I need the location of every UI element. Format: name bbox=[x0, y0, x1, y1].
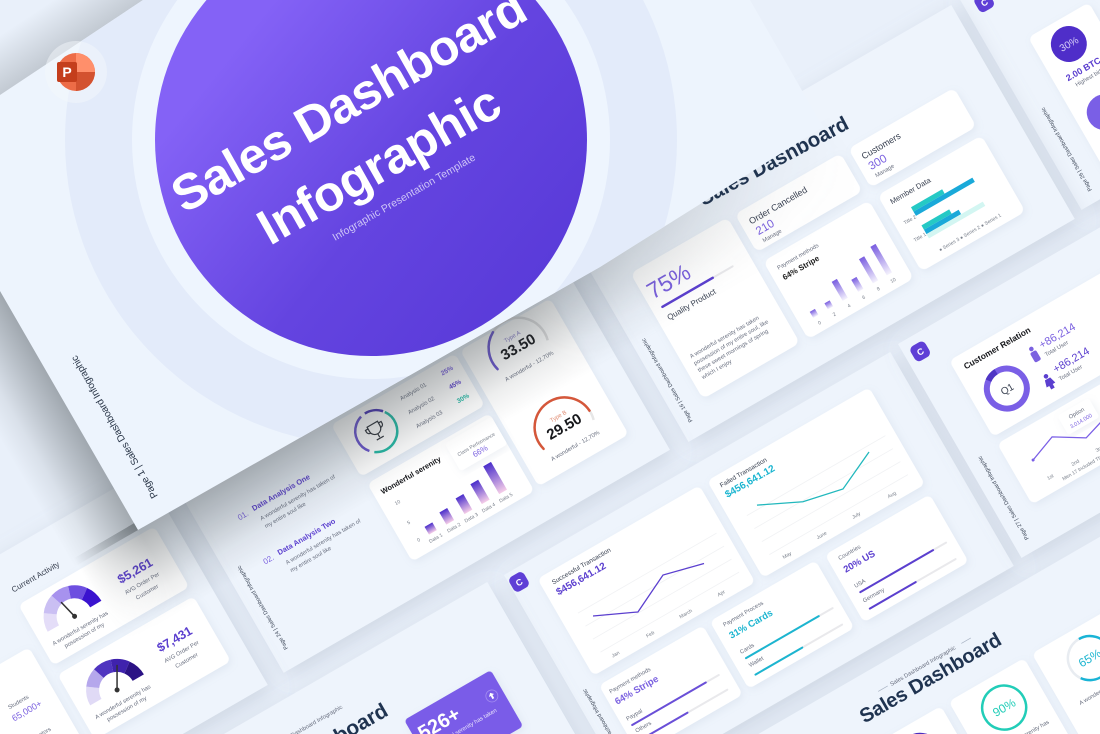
card: payment methods bar chart: 0 bbox=[817, 320, 823, 327]
text block: data analysis one: my entire soul like bbox=[264, 502, 307, 530]
slide: top right with percent cards bbox=[958, 0, 1100, 210]
icon: C badge bbox=[507, 570, 531, 594]
callout: class performance bbox=[445, 417, 507, 471]
card: analysis donut: Analysis 01 bbox=[399, 382, 428, 402]
title: infographic: Infographic bbox=[248, 74, 510, 256]
card: type gauges: A wonderful - 12,70% bbox=[550, 430, 601, 463]
card: failed transaction line chart: May bbox=[782, 551, 793, 561]
card: payment process: 31% Cards bbox=[727, 608, 775, 641]
card: member data bar chart: Title 1 bbox=[913, 232, 928, 244]
card: member data bar chart: Title 2 bbox=[903, 214, 918, 226]
icon: powerpoint logo: P bbox=[62, 64, 72, 80]
card: successful transaction line chart: March bbox=[678, 608, 694, 620]
decorative rings and main circle bbox=[65, 0, 677, 446]
card: member data bar chart bbox=[878, 135, 1025, 272]
card: failed transaction line chart: $456,641.12 bbox=[723, 463, 777, 501]
card: payment methods: Payment methods bbox=[609, 667, 652, 695]
card: quality product: these sweet mornings of spring bbox=[697, 329, 770, 374]
card: percent stats: 30% bbox=[1058, 35, 1081, 55]
card: analysis donut: 45% bbox=[448, 379, 463, 391]
card: failed transaction line chart: July bbox=[851, 511, 862, 521]
card: payment methods bar chart: 6 bbox=[861, 294, 867, 301]
card: analysis donut bbox=[330, 352, 485, 477]
text block: data analysis one: 01. bbox=[236, 509, 250, 522]
page label: Page 26 | Sales Dashboard Infographic bbox=[1040, 106, 1094, 192]
card: payment methods bar chart bbox=[763, 200, 914, 339]
main purple circle bbox=[155, 0, 587, 356]
card: wonderful serenity bar chart: 10 bbox=[394, 499, 402, 507]
text block: data analysis two: 02. bbox=[262, 553, 276, 566]
card: countries: Countries bbox=[838, 544, 862, 562]
card: wonderful serenity bar chart: Data 3 bbox=[464, 512, 480, 524]
card: customers: Manage bbox=[874, 164, 896, 179]
card: quality product: possession of my entire soul, like bbox=[693, 319, 770, 367]
card: wonderful serenity bar chart: Wonderful serenity bbox=[379, 454, 443, 496]
card: analysis donut: 30% bbox=[456, 392, 471, 405]
card: countries bbox=[825, 494, 969, 622]
heading: current activity: Current Activity bbox=[10, 560, 61, 594]
callout: option: 3.014.000 bbox=[1069, 413, 1094, 430]
card: quality product: A wonderful serenity has taken bbox=[689, 315, 760, 360]
card: 90 percent ring bbox=[949, 658, 1079, 734]
panel: upper background slide bbox=[640, 0, 950, 82]
card: gauge order two bbox=[57, 596, 231, 734]
card: customer relation: Total User bbox=[1058, 364, 1084, 383]
slide: data analysis bbox=[160, 236, 670, 673]
card: students: 65,000+ bbox=[10, 698, 44, 723]
card: gauge order one: Customer bbox=[135, 584, 160, 602]
card: analysis donut: Analysis 03 bbox=[415, 410, 444, 430]
slide: current activity bbox=[0, 471, 268, 734]
icon: powerpoint logo bbox=[45, 41, 107, 103]
card: successful transaction line chart bbox=[537, 485, 755, 676]
card: payment methods bar chart: 4 bbox=[847, 303, 852, 310]
icon: person male bbox=[1027, 345, 1041, 363]
card: payment methods bbox=[599, 625, 743, 734]
card: wonderful serenity bar chart bbox=[367, 413, 534, 562]
card: type gauges: 33.50 bbox=[498, 331, 539, 364]
card: wonderful serenity bar chart: Data 1 bbox=[428, 532, 444, 545]
card: failed transaction line chart: Aug bbox=[887, 490, 898, 500]
card: payment methods: 64% Stripe bbox=[613, 674, 661, 707]
card: payment process: Payment Process bbox=[722, 601, 765, 628]
card: analysis donut: Analysis 02 bbox=[407, 396, 436, 416]
page label: Page 1 | Sales Dashboard Infographic bbox=[70, 353, 161, 500]
card: students: Students bbox=[7, 694, 30, 711]
card: type gauges: Type B bbox=[549, 410, 568, 424]
page label: Page 27 | Sales Dashboard Infographic bbox=[977, 454, 1031, 541]
text: subheading bbox=[877, 636, 973, 695]
card: payment process: Wallet bbox=[748, 656, 765, 669]
page label: Page 24 | Sales Dashboard Infographic bbox=[236, 564, 290, 650]
card: customer relation bbox=[949, 266, 1100, 437]
card: gauge order one: A wonderful serenity has bbox=[52, 610, 110, 647]
card: payment methods bar chart: Payment methods bbox=[777, 243, 820, 272]
heading: slide title: Sales Dashboard bbox=[856, 629, 1006, 728]
callout: option: Option bbox=[1068, 407, 1086, 421]
card: payment process: Cards bbox=[739, 643, 756, 656]
card: 526 plus bbox=[404, 670, 523, 734]
card: order cancelled bbox=[735, 153, 863, 252]
card: quality product bbox=[630, 217, 800, 399]
card: gauge order two: Customer bbox=[175, 652, 199, 670]
card: type gauges: A wonderful - 12,70% bbox=[504, 350, 555, 383]
text block: data analysis two bbox=[261, 505, 367, 584]
card: wonderful serenity bar chart: Data 4 bbox=[481, 502, 497, 514]
icon: C badge bbox=[973, 0, 996, 14]
icon: C badge: C bbox=[514, 576, 525, 588]
card: wonderful serenity bar chart: 0 bbox=[416, 537, 422, 544]
card: type gauges: 29.50 bbox=[544, 410, 585, 444]
slide: bottom center with 526+ bbox=[101, 582, 611, 734]
card: member data bar chart: Member Data bbox=[888, 175, 933, 206]
card: payment process bbox=[710, 560, 854, 689]
card: successful transaction line chart: Apr bbox=[717, 589, 727, 598]
slide: customer relation bbox=[898, 121, 1100, 558]
icon: gauge one bbox=[41, 583, 97, 631]
card: customer relation: Total User bbox=[1044, 340, 1070, 358]
shadow: top edge of main slide bbox=[0, 0, 186, 120]
text block: data analysis two: my entire soul like bbox=[290, 546, 333, 574]
card: quality product: Quality Product bbox=[666, 287, 718, 322]
card: countries: USA bbox=[854, 578, 867, 590]
callout: option bbox=[1057, 398, 1100, 435]
card: wonderful serenity bar chart: 5 bbox=[406, 520, 412, 526]
callout: class performance: 66% bbox=[471, 443, 489, 459]
card: gauge order one: possession of my bbox=[64, 622, 106, 650]
card: gauge order two: possession of my bbox=[106, 696, 148, 723]
card: gauge order two: A wonderful serenity has bbox=[94, 684, 152, 721]
subtitle: Infographic Presentation Template bbox=[330, 152, 478, 244]
panel: main title slide bbox=[0, 0, 823, 530]
card: 65 percent ring bbox=[1032, 610, 1100, 734]
text block: data analysis one bbox=[236, 461, 341, 539]
slide: transactions bbox=[504, 352, 1014, 734]
card: customers: 300 bbox=[867, 153, 889, 173]
callout: class performance: Class Performance bbox=[457, 432, 497, 458]
text: subheading: Sales Dashboard Infographic bbox=[889, 645, 957, 688]
text block: data analysis two: Data Analysis Two bbox=[276, 516, 337, 557]
card: order cancelled: 210 bbox=[754, 218, 777, 238]
card: payment methods bar chart: 2 bbox=[832, 311, 837, 318]
card: order cancelled: Manage bbox=[762, 229, 783, 244]
card: gauge order two: AVG Order Per bbox=[164, 640, 200, 665]
card: quality product: 75% bbox=[642, 259, 695, 304]
card: gauge order one: AVG Order Per bbox=[124, 572, 161, 596]
card: analysis donut: 25% bbox=[440, 365, 455, 377]
card: successful transaction line chart: Jan bbox=[611, 650, 621, 659]
card: customers: Customers bbox=[860, 131, 903, 161]
icon: C badge bbox=[909, 340, 932, 363]
card: order cancelled: Order Cancelled bbox=[747, 185, 809, 226]
icon: person female bbox=[1041, 372, 1057, 391]
card: wonderful serenity bar chart: Data 5 bbox=[498, 492, 514, 504]
card: failed transaction line chart: Failed Transaction bbox=[719, 457, 769, 489]
card: successful transaction line chart: Successful Transaction bbox=[551, 547, 613, 586]
icon: gauge two bbox=[84, 656, 140, 704]
card: percent stats bbox=[1028, 2, 1100, 172]
shadow: bottom edge of main slide bbox=[80, 164, 768, 604]
card: customer relation: +86,214 bbox=[1037, 321, 1078, 351]
heading: slide title: Sales Dashboard bbox=[695, 112, 853, 211]
card: member data bar chart: ● Series 3 ● Series 2 ● Series 1 bbox=[938, 213, 1003, 253]
card: option line chart: 1st bbox=[1046, 473, 1055, 482]
card: failed transaction line chart: June bbox=[816, 530, 828, 541]
card: failed transaction line chart bbox=[707, 387, 925, 578]
shadow: left edge of main slide bbox=[0, 236, 143, 567]
text block: data analysis one: Data Analysis One bbox=[250, 472, 312, 513]
card: payment methods bar chart: 8 bbox=[876, 286, 882, 293]
card: payment methods bar chart: 10 bbox=[890, 277, 898, 285]
icon: trophy bbox=[364, 420, 388, 443]
slide: quality product dashboard bbox=[565, 5, 1075, 442]
card: purple ring bbox=[866, 706, 996, 734]
slide: bottom right sales dashboard bbox=[729, 528, 1100, 734]
card: quality product: which I enjoy bbox=[700, 359, 733, 381]
card: successful transaction line chart: Feb bbox=[645, 630, 656, 640]
card: countries: 20% US bbox=[842, 549, 877, 575]
card: option line chart: 2nd bbox=[1070, 458, 1081, 468]
card: payment methods: Paypal bbox=[625, 708, 644, 723]
card: type gauges bbox=[459, 296, 629, 486]
card: customer relation: +86,214 bbox=[1051, 345, 1092, 376]
card: students bbox=[0, 647, 89, 734]
card: customer relation: Q1 bbox=[999, 382, 1017, 398]
card: successful transaction line chart: $456,641.12 bbox=[555, 561, 609, 598]
card: wonderful serenity bar chart: Data 2 bbox=[446, 522, 462, 534]
card: gauge order one: $5,261 bbox=[115, 555, 155, 587]
card: customers bbox=[848, 88, 976, 188]
text block: data analysis two: A wonderful serenity has taken of bbox=[285, 518, 362, 566]
card: countries: Germany bbox=[862, 587, 886, 604]
card: customer relation: Customer Relation bbox=[962, 325, 1032, 371]
card: 90 percent ring: 90% bbox=[990, 695, 1018, 720]
text block: data analysis one: A wonderful serenity has taken of bbox=[260, 474, 337, 522]
card: gauge order one bbox=[18, 526, 189, 666]
card: payment methods bar chart: 64% Stripe bbox=[781, 253, 821, 282]
card: type gauges: Type A bbox=[503, 330, 522, 344]
card: gauge order two: $7,431 bbox=[155, 624, 195, 655]
card: option line chart bbox=[997, 359, 1100, 504]
page label: Page 16 | Sales Dashboard Infographic bbox=[641, 337, 694, 423]
icon: C badge: C bbox=[915, 346, 926, 358]
